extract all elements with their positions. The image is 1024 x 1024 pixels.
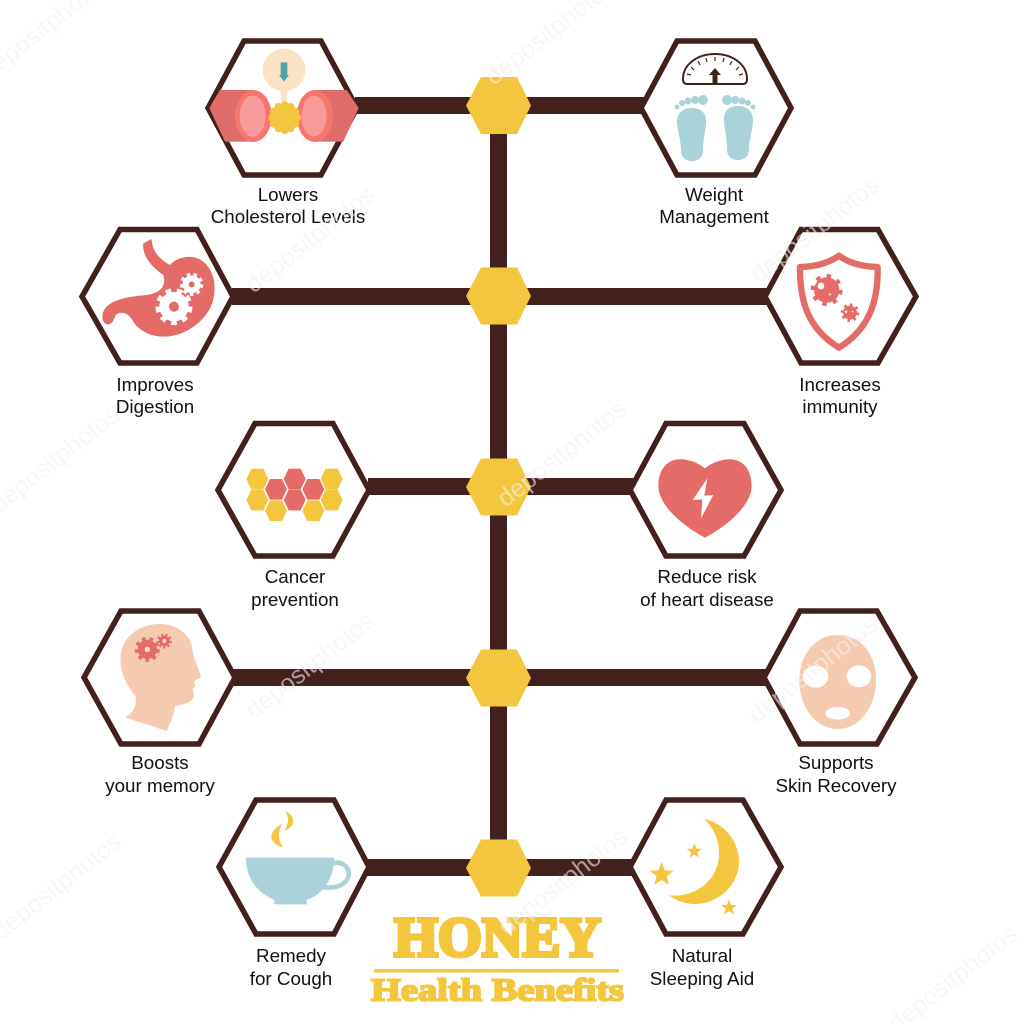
hexagon frame xyxy=(218,424,369,556)
label: Weight xyxy=(685,184,744,205)
label: of heart disease xyxy=(640,589,774,610)
connector: central spine and branches xyxy=(232,97,768,876)
hexagon frame xyxy=(630,800,781,934)
panel: natural sleeping aid xyxy=(630,800,781,989)
subtitle: Health Benefits xyxy=(371,972,624,1008)
label: Natural xyxy=(672,945,732,966)
icon: moon and stars xyxy=(650,818,739,914)
panel: boosts memory xyxy=(84,611,235,796)
hexagon frame xyxy=(82,230,233,363)
label: Digestion xyxy=(116,396,194,417)
hexagon frame xyxy=(765,230,916,363)
label: Improves xyxy=(116,374,194,395)
label: Sleeping Aid xyxy=(650,968,754,989)
watermark text: depositphotos xyxy=(493,823,633,941)
label: Reduce risk xyxy=(657,566,757,587)
icon: artery with plaque xyxy=(209,49,359,142)
panel: lowers cholesterol xyxy=(208,41,365,227)
label: for Cough xyxy=(250,968,332,989)
panel: increases immunity xyxy=(765,230,916,417)
label: Management xyxy=(659,206,770,227)
label: Boosts xyxy=(131,752,189,773)
label: Cancer xyxy=(265,566,325,587)
watermark text: depositphotos xyxy=(745,171,885,289)
label: Supports xyxy=(798,752,874,773)
icon: heart with bolt xyxy=(658,459,752,538)
panel: reduce risk of heart disease xyxy=(630,424,781,610)
title block xyxy=(371,907,624,1008)
hexagon frame xyxy=(208,41,357,175)
watermark text: depositphotos xyxy=(492,395,632,513)
panel: cancer prevention xyxy=(218,424,369,610)
title rule xyxy=(374,969,619,972)
icon: shield with viruses xyxy=(800,256,878,348)
label: Increases xyxy=(799,374,881,395)
hexagon frame xyxy=(641,41,791,175)
label: Remedy xyxy=(256,945,327,966)
hexagon frame xyxy=(84,611,235,744)
title: HONEY: HONEY xyxy=(394,907,601,969)
hexagon frame xyxy=(764,611,915,744)
label: immunity xyxy=(802,396,878,417)
icon: head with gears xyxy=(120,624,201,731)
icon: scale and feet xyxy=(674,54,756,161)
icon: face mask xyxy=(799,635,876,729)
label: Lowers xyxy=(258,184,318,205)
icon: stomach with gears xyxy=(102,239,215,337)
icon: honeycomb cells xyxy=(246,469,343,521)
honeycomb nodes on spine xyxy=(466,77,531,896)
label: your memory xyxy=(105,775,215,796)
panel: weight management xyxy=(641,41,791,227)
panel: supports skin recovery xyxy=(764,611,915,796)
hexagon frame xyxy=(630,424,781,556)
icon: tea cup with steam xyxy=(246,811,349,904)
panel: remedy for cough xyxy=(219,800,369,989)
watermark text: depositphotos xyxy=(743,611,883,729)
hexagon frame xyxy=(219,800,369,934)
panel: improves digestion xyxy=(82,230,233,417)
label: Skin Recovery xyxy=(775,775,897,796)
watermark text: depositphotos xyxy=(240,607,380,725)
label: prevention xyxy=(251,589,339,610)
label: Cholesterol Levels xyxy=(211,206,365,227)
watermark text: depositphotos xyxy=(240,181,380,299)
